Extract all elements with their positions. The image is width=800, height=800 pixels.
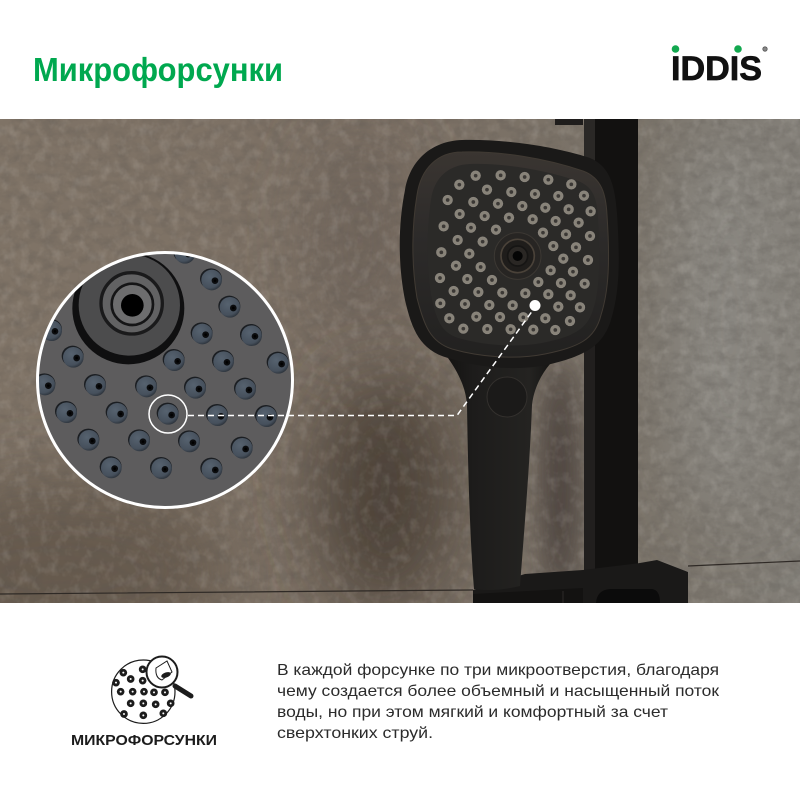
shower head	[400, 140, 619, 368]
icon label: МИКРОФОРСУНКИ	[71, 732, 217, 749]
magnified circle callout	[33, 242, 292, 508]
central outlet close-up	[33, 242, 289, 480]
description text: сверхтонких струй.	[277, 725, 433, 742]
wall background	[0, 119, 800, 603]
photo panel: shower on concrete wall	[0, 119, 800, 603]
description text: чему создается более объемный и насыщенный поток	[277, 683, 720, 700]
shower holder bracket	[473, 560, 688, 603]
description text	[277, 662, 720, 742]
title: Микрофорсунки	[33, 51, 283, 88]
wall seams	[0, 561, 800, 594]
description text: В каждой форсунке по три микроотверстия, благодаря	[277, 662, 719, 679]
leader dot	[530, 300, 540, 311]
dashed leader line	[188, 310, 533, 416]
icon: micro nozzles with magnifier	[112, 656, 191, 723]
shower rail	[555, 119, 638, 575]
head nozzles	[435, 170, 596, 335]
logo: IDDIS: IDDIS	[671, 50, 762, 88]
shower handle	[448, 358, 550, 590]
description text: воды, но при этом мягкий и комфортный за счет	[277, 704, 669, 721]
